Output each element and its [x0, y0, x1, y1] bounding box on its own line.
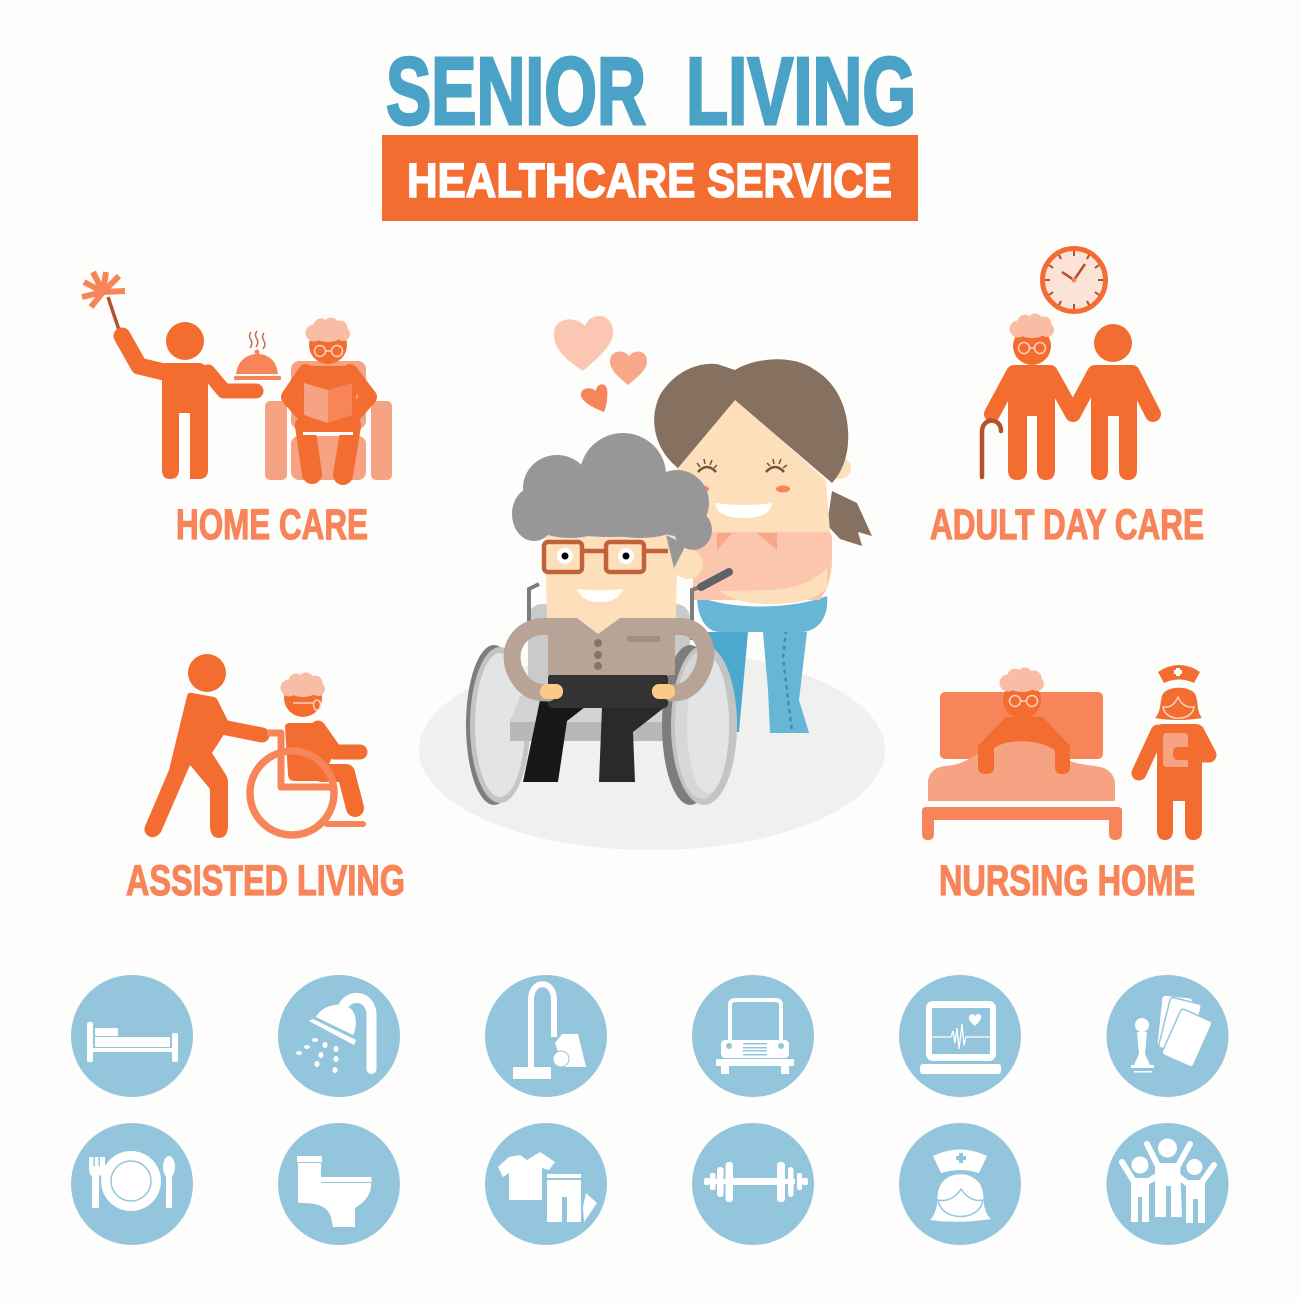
title: [386, 38, 916, 145]
icon: toilet: [278, 1123, 400, 1245]
icon: hearts: [554, 316, 647, 412]
figure: caregiver pushing: [144, 654, 262, 838]
panel: home care: [82, 272, 392, 480]
icon: bed with patient: [922, 668, 1122, 840]
icon: armchair: [265, 361, 392, 480]
icon: shower: [278, 975, 400, 1097]
icon: plate and cutlery: [71, 1123, 193, 1245]
figure: senior with cane: [982, 314, 1073, 480]
figure: companion: [1073, 324, 1153, 480]
icon: heart monitor: [899, 975, 1021, 1097]
icon: dumbbell: [692, 1123, 814, 1245]
label: nursing home: NURSING HOME: [939, 857, 1195, 905]
icon: bed: [71, 975, 193, 1097]
subtitle banner: [382, 135, 918, 221]
label: adult day care: ADULT DAY CARE: [930, 501, 1204, 549]
figure: caregiver: [122, 322, 256, 479]
figure: senior: [512, 433, 712, 782]
floor shadow: [419, 650, 885, 850]
figure: carer: [654, 359, 872, 733]
label: assisted living: ASSISTED LIVING: [126, 857, 405, 905]
title: SENIOR: [386, 38, 646, 145]
icon: feather duster: [82, 272, 125, 333]
icon: bus: [692, 975, 814, 1097]
icon: vacuum cleaner: [485, 975, 607, 1097]
subtitle banner: HEALTHCARE SERVICE: [407, 155, 892, 208]
panel: assisted living: [144, 654, 363, 838]
title: LIVING: [686, 38, 916, 145]
icon: nurse head: [899, 1123, 1021, 1245]
central illustration: senior and carer: [419, 316, 885, 850]
icon: food cloche: [234, 331, 281, 380]
figure: senior reading: [289, 318, 369, 475]
icon: wall clock: [1042, 248, 1106, 312]
panel: adult day care: [982, 248, 1153, 480]
panel: service icons: [71, 975, 1228, 1245]
figure: nurse: [1139, 665, 1209, 840]
wheelchair: [466, 572, 737, 805]
label: home care: HOME CARE: [176, 501, 368, 549]
icon: pawn and cards: [1106, 975, 1228, 1097]
figure: senior in wheelchair: [250, 672, 363, 835]
icon: laundry: [485, 1123, 607, 1245]
icon: family group: [1106, 1123, 1228, 1245]
panel: nursing home: [922, 665, 1209, 840]
